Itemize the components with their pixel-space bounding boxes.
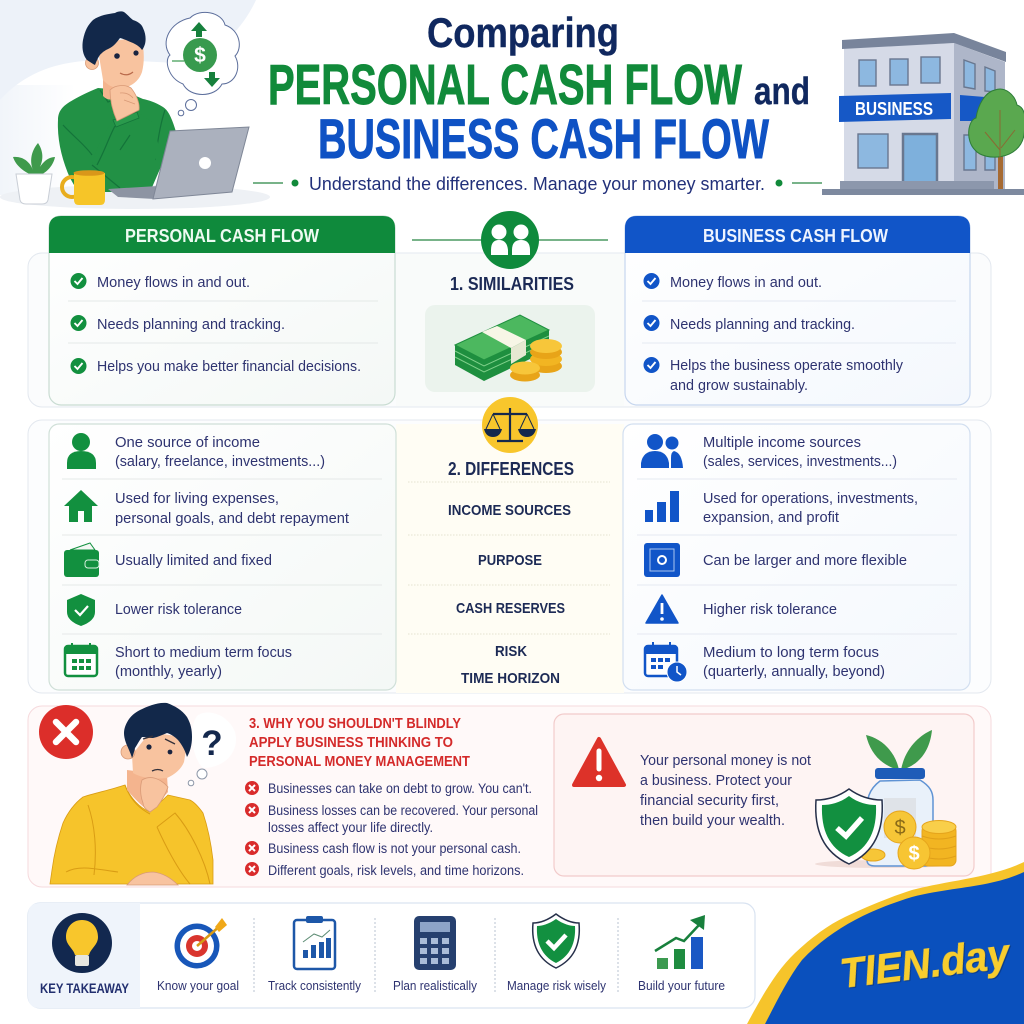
- title: BUSINESS CASH FLOW: [318, 107, 769, 170]
- row: reserves: Usually limited and fixed: [115, 553, 272, 569]
- heading: 1. SIMILARITIES: [450, 274, 574, 294]
- hair: [82, 11, 146, 65]
- title: Comparing: [427, 9, 619, 56]
- row: reserves: [64, 543, 272, 577]
- title: [268, 9, 810, 170]
- bullet 2: [245, 803, 538, 835]
- label: income sources: INCOME SOURCES: [448, 502, 571, 519]
- callout text: a business. Protect your: [640, 772, 792, 789]
- bullet 1: Businesses can take on debt to grow. You can't.: [268, 781, 532, 796]
- sweater: [58, 88, 176, 192]
- panel: differences backdrop: [28, 420, 991, 693]
- label: cash reserves: CASH RESERVES: [456, 600, 565, 617]
- bullet 2: losses affect your life directly.: [268, 820, 433, 835]
- row: time horizon: Medium to long term focus: [703, 645, 879, 661]
- row: reserves: [644, 543, 907, 577]
- illustration: man thinking at laptop: [13, 11, 249, 205]
- takeaway: plan realistically: [393, 916, 478, 993]
- takeaway: know your goal: [157, 918, 239, 993]
- row: income: Multiple income sources: [703, 435, 861, 451]
- row: income: (salary, freelance, investments...): [115, 454, 325, 470]
- heading: APPLY BUSINESS THINKING TO: [249, 734, 453, 751]
- arm and hand: [92, 111, 160, 192]
- hair: [124, 703, 192, 758]
- takeaway: plan realistically: Plan realistically: [393, 979, 478, 993]
- heading: [249, 715, 470, 770]
- hand at chin: [141, 778, 168, 812]
- row: risk: [67, 594, 242, 626]
- panel: key takeaway: [28, 903, 755, 1008]
- title: and: [754, 71, 810, 113]
- card header: BUSINESS CASH FLOW: [703, 226, 888, 246]
- illustration: jar, shield and coins: $: [894, 817, 906, 839]
- row: risk: [646, 595, 837, 623]
- panel: why not blindly apply: [28, 703, 991, 887]
- callout text: [640, 752, 812, 829]
- takeaway: track consistently: [268, 916, 362, 993]
- icon: warning triangle: [574, 739, 624, 785]
- illustration: business building: BUSINESS: [855, 99, 933, 119]
- illustration: business building: [822, 33, 1024, 195]
- item 2: Needs planning and tracking.: [670, 317, 855, 333]
- item 2: Needs planning and tracking.: [97, 317, 285, 333]
- label: purpose: PURPOSE: [478, 552, 542, 569]
- callout text: Your personal money is not: [640, 752, 812, 769]
- thought bubble: [166, 12, 239, 116]
- heading: PERSONAL MONEY MANAGEMENT: [249, 753, 470, 770]
- neck and face: [103, 76, 124, 100]
- row: time horizon: (quarterly, annually, beyond): [703, 664, 885, 680]
- takeaway: manage risk wisely: Manage risk wisely: [507, 979, 607, 993]
- section 1: similarities: [412, 211, 608, 392]
- row: income: [67, 433, 325, 470]
- callout text: financial security first,: [640, 792, 779, 809]
- money illustration: [425, 305, 595, 392]
- plant: [13, 143, 55, 204]
- card header: [625, 216, 970, 253]
- row: reserves: Can be larger and more flexible: [703, 553, 907, 569]
- row: purpose: Used for operations, investments,: [703, 491, 918, 507]
- row: purpose: [645, 491, 918, 526]
- panel: business differences: [623, 424, 970, 690]
- background blob: [0, 0, 270, 209]
- tree: [969, 89, 1024, 189]
- illustration: jar, shield and coins: $: [908, 843, 920, 865]
- item 3: [644, 357, 904, 394]
- row: purpose: personal goals, and debt repayment: [115, 511, 349, 527]
- row: purpose: Used for living expenses,: [115, 491, 279, 507]
- panel: business cash flow card: [625, 216, 970, 405]
- illustration: confused man: [50, 703, 236, 885]
- bullet 4: Different goals, risk levels, and time horizons.: [268, 863, 524, 878]
- row: income: [641, 434, 897, 470]
- row: time horizon: (monthly, yearly): [115, 664, 222, 680]
- row: time horizon: Short to medium term focus: [115, 645, 292, 661]
- takeaway: build your future: [638, 915, 725, 993]
- label: time horizon: TIME HORIZON: [461, 670, 560, 687]
- card header: [49, 216, 395, 253]
- row: time horizon: [645, 642, 885, 682]
- label: risk: RISK: [495, 643, 527, 660]
- illustration: confused man: ?: [201, 724, 223, 763]
- icon: red x: [39, 705, 93, 759]
- takeaway: know your goal: Know your goal: [157, 979, 239, 993]
- row: purpose: expansion, and profit: [703, 510, 839, 526]
- item 3: Helps the business operate smoothly: [670, 358, 904, 374]
- subtitle: Understand the differences. Manage your money smarter.: [309, 173, 765, 194]
- takeaway: manage risk wisely: [507, 914, 607, 993]
- item 3: Helps you make better financial decisions.: [97, 359, 361, 375]
- callout: [554, 714, 974, 876]
- icon: light bulb: [52, 913, 112, 973]
- panel: personal cash flow card: [49, 216, 395, 405]
- panel: similarities backdrop: [28, 253, 991, 407]
- item 3: and grow sustainably.: [670, 378, 808, 394]
- heading: 2. DIFFERENCES: [448, 459, 574, 479]
- item 1: Money flows in and out.: [670, 275, 822, 291]
- mug: [62, 170, 105, 205]
- sweater: [50, 785, 213, 884]
- panel: personal differences: [49, 424, 396, 690]
- card header: PERSONAL CASH FLOW: [125, 226, 319, 246]
- row: time horizon: [65, 643, 292, 680]
- face: [127, 770, 168, 812]
- row: risk: Lower risk tolerance: [115, 602, 242, 618]
- title: PERSONAL CASH FLOW: [268, 53, 742, 117]
- bullet 2: Business losses can be recovered. Your personal: [268, 803, 538, 818]
- icon: scales: [482, 397, 538, 453]
- takeaway: build your future: Build your future: [638, 979, 725, 993]
- panel: differences labels: [408, 397, 610, 687]
- icon: two people: [481, 211, 539, 269]
- item 1: Money flows in and out.: [97, 275, 250, 291]
- thought bubble: $: [194, 44, 206, 67]
- row: purpose: [64, 490, 349, 527]
- brand corner: TIEN.day: TIEN.day: [837, 929, 1014, 997]
- callout text: then build your wealth.: [640, 812, 785, 829]
- row: income: One source of income: [115, 435, 260, 451]
- row: income: (sales, services, investments...): [703, 454, 897, 470]
- row: risk: Higher risk tolerance: [703, 602, 837, 618]
- takeaway: track consistently: Track consistently: [268, 979, 362, 993]
- brand corner: TIEN.day: [747, 862, 1024, 1024]
- label: KEY TAKEAWAY: [40, 980, 130, 996]
- heading: 3. WHY YOU SHOULDN'T BLINDLY: [249, 715, 461, 732]
- illustration: jar, shield and coins: [815, 730, 956, 869]
- bullet 3: Business cash flow is not your personal cash.: [268, 841, 521, 856]
- laptop: [108, 127, 249, 199]
